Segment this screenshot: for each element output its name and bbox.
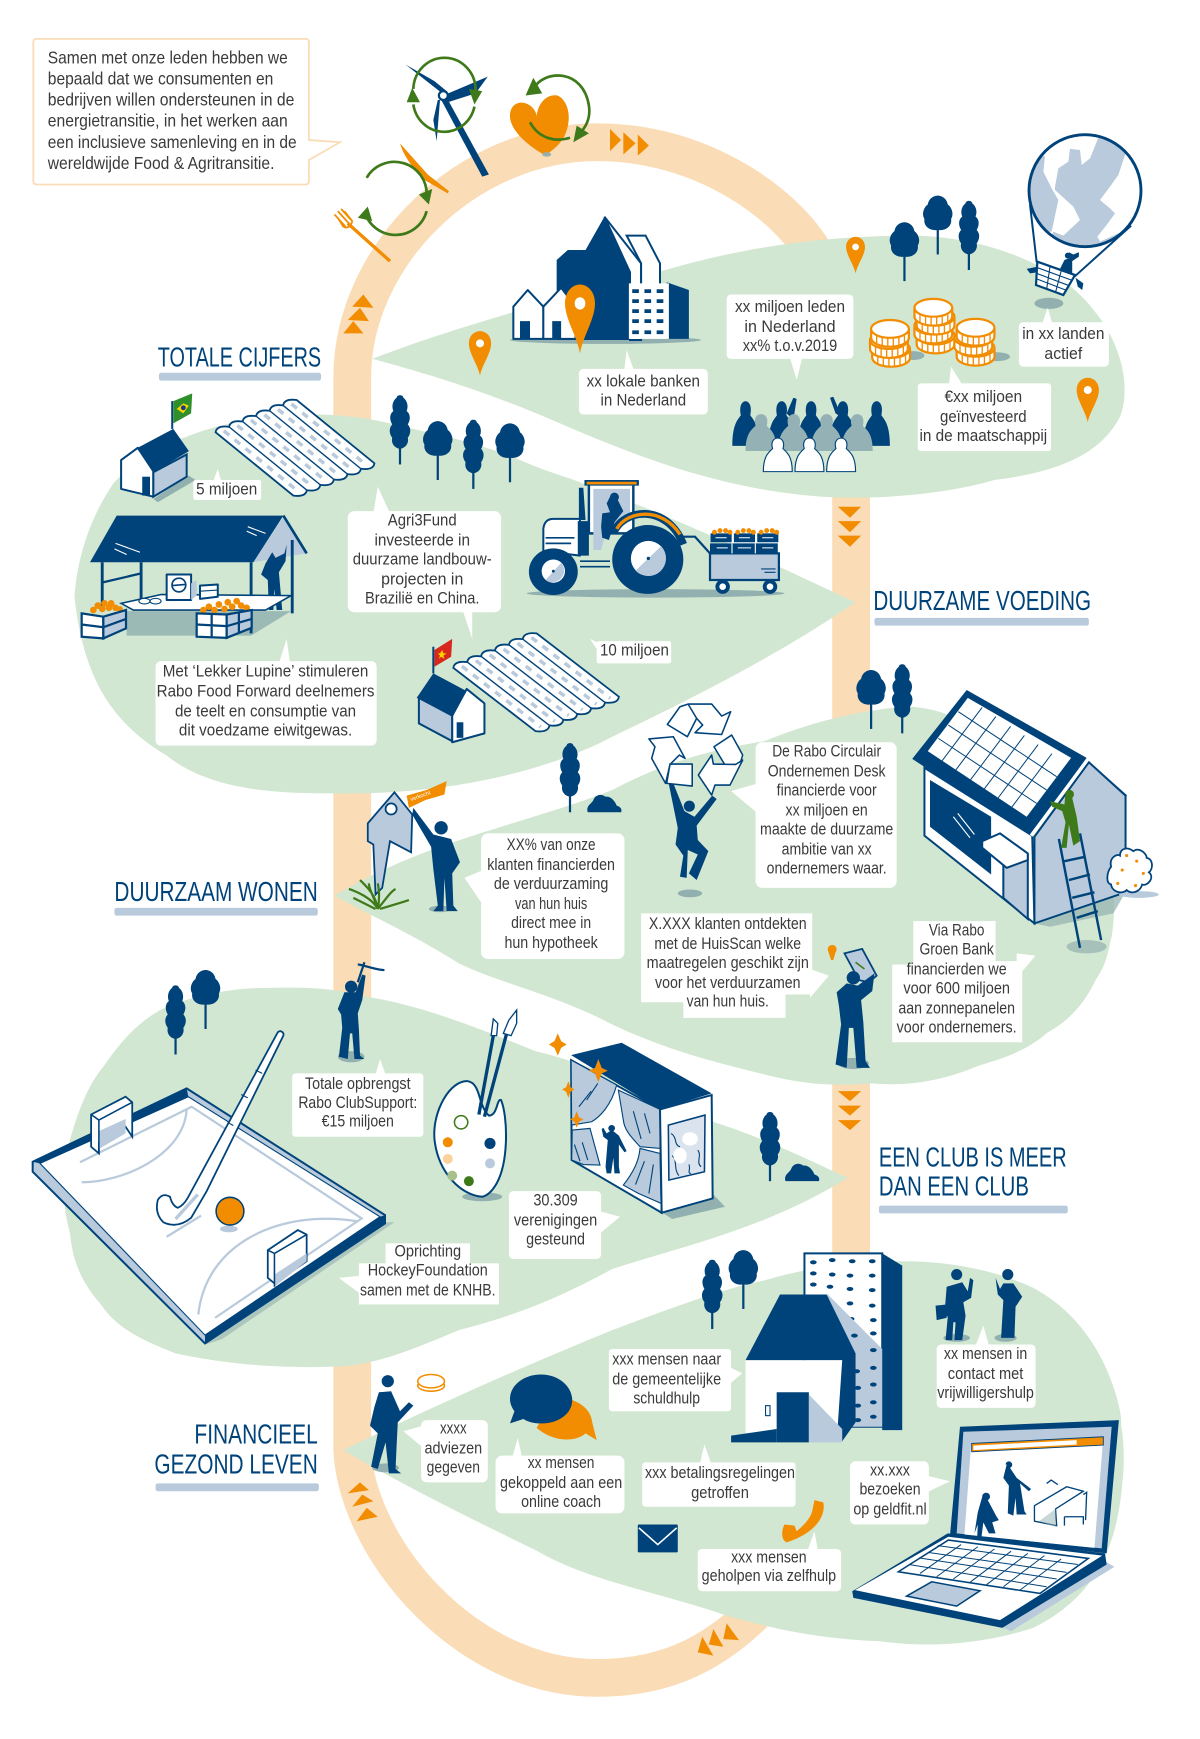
- callout: geldfit bezoeken: [850, 1461, 950, 1525]
- heading: een club is meer dan een club: DAN EEN CLUB: [879, 1171, 1029, 1202]
- direction arrows: bottom left route: [348, 1482, 378, 1521]
- callout: huisscan: X.XXX klanten ontdekten: [649, 914, 807, 933]
- callout: agri3fund: Brazilië en China.: [365, 588, 479, 607]
- callout: schuldhulp: schuldhulp: [633, 1388, 700, 1407]
- icons: speech bubbles: [510, 1375, 597, 1440]
- callout: agri3fund: [348, 487, 501, 639]
- direction arrows: top of route: [610, 129, 649, 156]
- callout: 5 miljoen: [193, 469, 261, 500]
- heading: financieel gezond leven: GEZOND LEVEN: [154, 1448, 318, 1479]
- callout: rabo circulair: ambitie van xx: [782, 839, 872, 858]
- illustration: market stall with crates: [82, 516, 307, 638]
- callout: huisscan: [641, 913, 829, 1018]
- icon: knife: [400, 143, 449, 193]
- illustration: key with sale flag: [368, 781, 447, 895]
- heading: een club is meer dan een club: [879, 1142, 1068, 1213]
- callout: huisscan: van hun huis.: [687, 992, 769, 1011]
- callout: geldfit bezoeken: bezoeken: [859, 1480, 921, 1499]
- intro text box: Samen met onze leden hebben we: [48, 47, 288, 67]
- callout: landen actief: actief: [1044, 344, 1083, 363]
- callout: 5 miljoen: 5 miljoen: [196, 479, 257, 498]
- callout: zelfhulp: xxx mensen: [731, 1547, 807, 1566]
- illustration: bank buildings with pin: [510, 217, 701, 353]
- callout: klanten hypotheek: XX% van onze: [507, 835, 596, 854]
- heading: duurzame voeding: [873, 585, 1091, 626]
- callout: geinvesteerd: in de maatschappij: [919, 426, 1047, 445]
- callout: online coach: xx mensen: [528, 1453, 594, 1472]
- heading: een club is meer dan een club: EEN CLUB IS MEER: [879, 1142, 1067, 1173]
- callout: lokale banken: in Nederland: [601, 391, 686, 410]
- callout: schuldhulp: [609, 1349, 742, 1411]
- callout: klanten hypotheek: [464, 833, 624, 959]
- callout: betalingsregelingen: getroffen: [691, 1483, 749, 1502]
- callout: groen bank: aan zonnepanelen: [898, 998, 1015, 1017]
- callout: online coach: [496, 1438, 624, 1513]
- callout: geinvesteerd: geïnvesteerd: [940, 407, 1027, 426]
- callout: miljoen leden: xx% t.o.v.2019: [743, 336, 837, 355]
- direction arrows: bottom route: [698, 1623, 739, 1656]
- figure: jumping person holding recycling: [669, 783, 717, 897]
- icon: small coin: [418, 1375, 444, 1391]
- heading: financieel gezond leven: [154, 1418, 319, 1491]
- illustration: hot air balloon globe: [1022, 135, 1141, 309]
- callout: groen bank: Via Rabo: [929, 921, 984, 940]
- callout: rabo circulair: financierde voor: [777, 781, 877, 800]
- background ribbon: peach route: [352, 142, 851, 1678]
- illustration: crop field China: [450, 631, 622, 733]
- icon: location pin top: [846, 237, 865, 273]
- callout: rabo circulair: ondernemers waar.: [767, 858, 887, 877]
- callout: schuldhulp: de gemeentelijke: [612, 1370, 721, 1389]
- callout: verenigingen: 30.309: [533, 1191, 578, 1210]
- callout: online coach: online coach: [521, 1492, 601, 1511]
- callout: klanten hypotheek: de verduurzaming: [494, 874, 608, 893]
- icon: location pin left: [469, 331, 491, 376]
- callout: huisscan: met de HuisScan welke: [654, 934, 801, 953]
- figure: adviser: [370, 1375, 413, 1473]
- illustration: paint palette with brushes: [434, 1010, 517, 1201]
- trees club leaf: [165, 970, 819, 1181]
- callout: lekker lupine: Met ‘Lekker Lupine’ stimuleren: [163, 662, 368, 681]
- direction arrows: right route downward: [838, 507, 861, 547]
- callout: 10 miljoen: 10 miljoen: [600, 641, 669, 660]
- callout: 10 miljoen: [590, 639, 671, 663]
- trees top: [890, 196, 979, 281]
- callout: miljoen leden: in Nederland: [744, 317, 836, 336]
- figures: two people talking: [936, 1269, 1022, 1342]
- callout: lekker lupine: dit voedzame eiwitgewas.: [179, 721, 352, 740]
- panel: green leaf een club is meer dan een club: [63, 988, 848, 1367]
- callout: schuldhulp: xxx mensen naar: [612, 1350, 721, 1369]
- illustration: farm house China with flag: [417, 639, 484, 742]
- figure: person with tablet and idea bulb: [828, 945, 877, 1069]
- callout: groen bank: voor ondernemers.: [897, 1017, 1017, 1036]
- illustration: coin stacks: [870, 299, 1010, 367]
- intro text box: [33, 39, 340, 184]
- icon: flowering shrub: [1107, 849, 1159, 898]
- callout: hockeyfoundation: Oprichting: [394, 1242, 461, 1261]
- callout: verenigingen: gesteund: [526, 1230, 585, 1249]
- callout: groen bank: financierden we: [907, 960, 1007, 979]
- callout: betalingsregelingen: [642, 1445, 796, 1507]
- callout: zelfhulp: geholpen via zelfhulp: [702, 1566, 836, 1585]
- illustration: laptop with geldfit site: [852, 1420, 1119, 1631]
- callout: vrijwilligershulp: [937, 1326, 1036, 1408]
- callout: adviezen: gegeven: [427, 1457, 480, 1476]
- intro text box: energietransitie, in het werken aan: [48, 111, 288, 131]
- callout: klanten hypotheek: van hun huis: [515, 894, 587, 913]
- callout: lekker lupine: de teelt en consumptie van: [175, 702, 356, 721]
- callout: klanten hypotheek: klanten financierden: [487, 855, 615, 874]
- icon: telephone: [782, 1500, 824, 1542]
- illustration: recycling symbol arrows: [649, 704, 743, 795]
- callout: rabo circulair: maakte de duurzame: [760, 819, 893, 838]
- callout: clubsupport: Totale opbrengst: [305, 1074, 411, 1093]
- callout: klanten hypotheek: hun hypotheek: [504, 933, 598, 952]
- callout: lokale banken: xx lokale banken: [587, 372, 700, 391]
- figure: hockey player raising stick: [338, 962, 384, 1062]
- callout: zelfhulp: [698, 1531, 841, 1591]
- callout: adviezen: xxxx: [440, 1418, 467, 1437]
- intro text box: bepaald dat we consumenten en: [48, 68, 273, 88]
- callout: groen bank: voor 600 miljoen: [903, 978, 1010, 997]
- direction arrows: left route upward: [343, 294, 373, 333]
- callout: verenigingen: [509, 1191, 620, 1259]
- icon: wind turbine with circular arrows: [406, 58, 489, 177]
- callout: betalingsregelingen: xxx betalingsregelingen: [645, 1463, 795, 1482]
- illustration: crop field Brazil: [213, 398, 377, 498]
- illustration: grass tuft: [349, 880, 409, 909]
- callout: klanten hypotheek: direct mee in: [511, 913, 591, 932]
- callout: landen actief: [1019, 308, 1109, 367]
- callout: vrijwilligershulp: xx mensen in: [944, 1344, 1027, 1363]
- callout: groen bank: [892, 921, 1036, 1042]
- illustration: theatre box with curtains: [571, 1043, 725, 1219]
- illustration: tractor with trailer: [527, 480, 784, 598]
- icon: location pin right: [1077, 378, 1099, 422]
- illustration: crowd of members: [732, 397, 890, 472]
- figure: man beside key: [412, 808, 460, 912]
- callout: geinvesteerd: €xx miljoen: [944, 387, 1022, 406]
- callout: agri3fund: investeerde in: [374, 531, 470, 550]
- callout: rabo circulair: xx miljoen en: [786, 801, 868, 820]
- callout: agri3fund: Agri3Fund: [388, 511, 457, 530]
- icon: fork with circular arrows: [334, 162, 432, 261]
- callout: hockeyfoundation: [339, 1242, 499, 1305]
- heading: duurzaam wonen: [114, 876, 318, 916]
- intro text box: bedrijven willen ondersteunen in de: [48, 90, 294, 110]
- trees finance leaf: [702, 1250, 758, 1329]
- callout: rabo circulair: [731, 742, 897, 888]
- callout: rabo circulair: De Rabo Circulair: [772, 742, 881, 761]
- illustration: hockey field: [33, 1031, 394, 1345]
- intro text box: een inclusieve samenleving en in de: [48, 132, 297, 152]
- callout: lekker lupine: [156, 639, 377, 746]
- callout: rabo circulair: Ondernemen Desk: [768, 762, 886, 781]
- callout: geldfit bezoeken: xx.xxx: [870, 1461, 911, 1480]
- callout: online coach: gekoppeld aan een: [500, 1473, 622, 1492]
- callout: vrijwilligershulp: vrijwilligershulp: [937, 1383, 1034, 1402]
- trees home leaf: [560, 664, 912, 812]
- callout: hockeyfoundation: HockeyFoundation: [368, 1261, 488, 1280]
- icon: heart with circular arrows: [510, 76, 589, 157]
- illustration: tower block and small house: [731, 1253, 902, 1442]
- callout: groen bank: Groen Bank: [919, 940, 994, 959]
- illustration: farm house Brazil with flag: [121, 393, 196, 502]
- callout: vrijwilligershulp: contact met: [948, 1364, 1024, 1383]
- callout: verenigingen: verenigingen: [514, 1211, 597, 1230]
- callout: lokale banken: [579, 350, 708, 414]
- callout: clubsupport: €15 miljoen: [322, 1112, 394, 1131]
- callout: huisscan: maatregelen geschikt zijn: [647, 953, 809, 972]
- callout: landen actief: in xx landen: [1022, 324, 1104, 343]
- callout: miljoen leden: [727, 294, 853, 380]
- callout: hockeyfoundation: samen met de KNHB.: [360, 1281, 496, 1300]
- callout: lekker lupine: Rabo Food Forward deelnemers: [157, 682, 374, 701]
- panel: green leaf duurzaam wonen: [334, 707, 1114, 1085]
- callout: agri3fund: projecten in: [381, 569, 463, 588]
- illustration: house with solar panels: [912, 690, 1129, 953]
- heading: duurzame voeding: DUURZAME VOEDING: [873, 585, 1091, 616]
- callout: huisscan: voor het verduurzamen: [655, 973, 801, 992]
- heading: duurzaam wonen: DUURZAAM WONEN: [114, 876, 318, 907]
- intro text box: wereldwijde Food & Agritransitie.: [47, 153, 274, 173]
- icons: orange sparkles: [549, 1033, 608, 1128]
- trees food leaf: [390, 395, 525, 489]
- heading: totale cijfers: TOTALE CIJFERS: [158, 342, 321, 373]
- callout: geldfit bezoeken: op geldfit.nl: [853, 1500, 927, 1519]
- illustration: key with sale flag: verkocht: [410, 790, 432, 803]
- icon: envelope: [638, 1525, 678, 1552]
- callout: adviezen: adviezen: [424, 1438, 482, 1457]
- callout: clubsupport: [292, 1059, 423, 1137]
- panel: green leaf totale cijfers: [372, 236, 1125, 498]
- callout: agri3fund: duurzame landbouw-: [353, 549, 492, 568]
- panel: green leaf duurzame voeding: [74, 414, 856, 794]
- heading: totale cijfers: [158, 342, 321, 381]
- heading: financieel gezond leven: FINANCIEEL: [194, 1418, 318, 1449]
- panel: green leaf financieel gezond leven: [343, 1261, 1124, 1645]
- direction arrows: right route downward second: [838, 1091, 861, 1130]
- callout: geinvesteerd: [918, 367, 1051, 451]
- callout: clubsupport: Rabo ClubSupport:: [298, 1093, 417, 1112]
- callout: adviezen: [403, 1418, 488, 1482]
- callout: miljoen leden: xx miljoen leden: [735, 297, 845, 316]
